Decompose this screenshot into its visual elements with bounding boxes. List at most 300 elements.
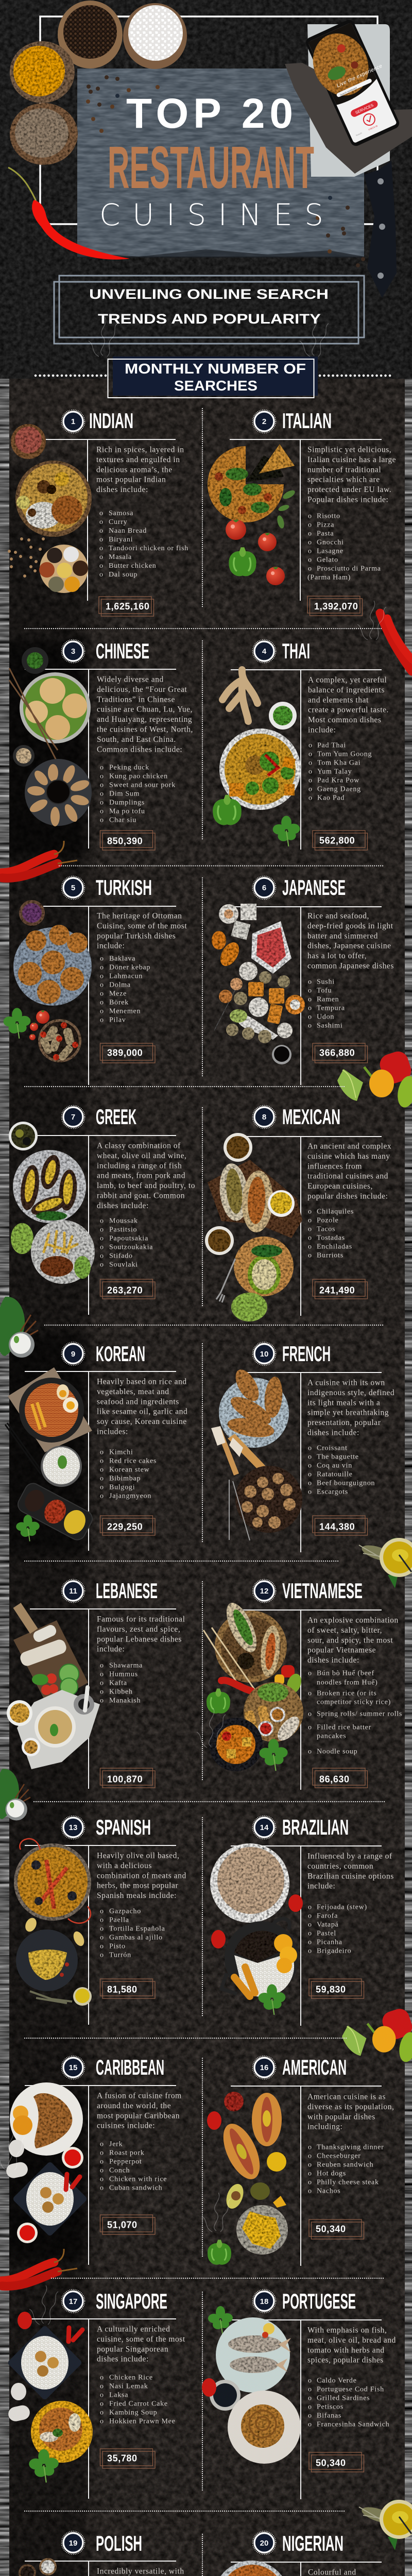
search count bbox=[100, 1979, 155, 1998]
dish list: o bbox=[100, 773, 104, 780]
description: create a powerful taste. bbox=[308, 706, 389, 715]
dish list: o bbox=[308, 530, 312, 538]
icon: fork bbox=[216, 1259, 235, 1302]
dish list: Nasi Lemak bbox=[109, 2382, 148, 2391]
number badge bbox=[252, 876, 276, 900]
dish list: o bbox=[100, 1670, 104, 1679]
dish list: o bbox=[308, 1921, 312, 1929]
search count: 229,250 bbox=[107, 1522, 143, 1532]
description: seafood and ingredients bbox=[97, 1397, 179, 1406]
description: Heavily based on rice and bbox=[97, 1378, 187, 1386]
dish list: Börek bbox=[109, 998, 129, 1007]
dish list: o bbox=[308, 1903, 312, 1911]
icon: knife handle bbox=[364, 161, 397, 298]
icon: phone with pizza app bbox=[301, 15, 408, 149]
description: Traditions” in Chinese bbox=[97, 695, 175, 704]
subtitle: UNVEILING ONLINE SEARCH bbox=[89, 286, 329, 302]
description: traditional cuisines and bbox=[307, 1172, 388, 1181]
icon: mustard bbox=[267, 2152, 286, 2172]
dish list: Fried Carrot Cake bbox=[109, 2400, 168, 2408]
icon: salt shakers bbox=[5, 2140, 29, 2179]
search count bbox=[309, 2219, 364, 2239]
icon: sesame bowl bbox=[13, 745, 35, 767]
dish list: Bifanas bbox=[317, 2412, 341, 2419]
icon: purple cabbage bowl bbox=[19, 900, 45, 926]
dish list: Lahmacun bbox=[109, 973, 143, 980]
dish list: o bbox=[100, 1680, 104, 1687]
icon: red peppers bbox=[211, 1894, 303, 1948]
icon: stuffed aubergine plate bbox=[13, 1150, 86, 1223]
number badge: 8 bbox=[262, 1113, 266, 1122]
dish list: Peking duck bbox=[109, 764, 149, 772]
icon: ketchup bbox=[224, 2092, 244, 2111]
dish list: Farofa bbox=[317, 1912, 338, 1920]
dish list: Tempura bbox=[317, 1005, 345, 1012]
section: Vietnamese bbox=[197, 1579, 402, 1790]
title bbox=[99, 90, 323, 232]
dish list: o bbox=[308, 539, 312, 546]
number badge bbox=[62, 2290, 84, 2313]
dish list: o bbox=[308, 1013, 312, 1021]
search count: 51,070 bbox=[107, 2219, 138, 2230]
dish list: Pepperpot bbox=[109, 2158, 142, 2166]
icon: coriander bbox=[259, 1739, 288, 1771]
number badge bbox=[62, 876, 84, 900]
icon: basil leaves bbox=[276, 488, 296, 529]
description: spices, popular dishes bbox=[307, 2356, 384, 2365]
icon: smoke bbox=[202, 2193, 231, 2232]
icon: oil dish bbox=[73, 1987, 92, 2006]
dish list: Moussak bbox=[109, 1217, 138, 1225]
description: deep-fried goods in light bbox=[307, 922, 393, 930]
number badge bbox=[252, 1580, 276, 1602]
search count: 59,830 bbox=[316, 1985, 346, 1995]
dish list: o bbox=[308, 1462, 312, 1469]
dish list: o bbox=[100, 1449, 104, 1456]
description: A classy combination of bbox=[97, 1142, 181, 1150]
dish list: o bbox=[308, 1243, 312, 1251]
icon: coriander bbox=[16, 1515, 40, 1541]
dish list: o bbox=[100, 2149, 104, 2157]
search count: 389,000 bbox=[107, 1048, 143, 1058]
dish list: Tom Yum Goong bbox=[317, 750, 372, 758]
description: cuisine are Chuan, Lu, Yue, bbox=[97, 705, 193, 714]
number badge bbox=[62, 1816, 84, 1839]
dish list: o bbox=[308, 742, 313, 749]
icon: napkin bbox=[17, 1690, 100, 1769]
icon: laksa bowl bbox=[31, 2401, 93, 2463]
icon: soup bowl bbox=[11, 424, 46, 459]
dish list: o bbox=[99, 527, 104, 535]
dish list: o bbox=[100, 1217, 104, 1225]
dotted divider bbox=[25, 1561, 340, 1562]
section: Caribbean bbox=[0, 2055, 182, 2286]
dish list: o bbox=[308, 1930, 312, 1937]
description: wheat, olive oil and wine, bbox=[97, 1151, 186, 1160]
dish list: Ma po tofu bbox=[109, 808, 145, 815]
icon: cleaver blade bbox=[307, 24, 390, 177]
description: European cuisines, bbox=[307, 1182, 373, 1191]
dish list: Vatapá bbox=[317, 1921, 339, 1929]
number badge bbox=[252, 1816, 276, 1839]
dish list: o bbox=[308, 1710, 312, 1718]
search count bbox=[313, 831, 368, 850]
description: textures and engulfed in bbox=[96, 455, 180, 464]
dish list: o bbox=[100, 1261, 104, 1268]
icon: nachos plate bbox=[236, 2205, 288, 2255]
number badge: 16 bbox=[260, 2063, 268, 2072]
dish list: o bbox=[100, 1917, 104, 1924]
dish list: Roast pork bbox=[109, 2149, 145, 2157]
dish list: o bbox=[100, 1662, 104, 1669]
icon: parsley bbox=[259, 1984, 285, 2015]
dish list: o bbox=[308, 1470, 312, 1479]
search count: 50,340 bbox=[316, 2224, 346, 2234]
heading: TURKISH bbox=[96, 875, 152, 900]
icon: peppercorn bowl bbox=[58, 1, 123, 69]
heading: LEBANESE bbox=[96, 1579, 158, 1603]
icon: baguettes bbox=[211, 1426, 268, 1476]
search count bbox=[307, 596, 363, 616]
dish list: Jerk bbox=[109, 2140, 123, 2148]
dish list: o bbox=[100, 2409, 104, 2416]
dish list: Döner kebap bbox=[109, 963, 150, 972]
icon: red chillies bbox=[1, 841, 77, 878]
dish list: Shawarma bbox=[109, 1662, 143, 1669]
dish list: Kung pao chicken bbox=[109, 773, 168, 780]
number badge: 1 bbox=[71, 417, 75, 426]
icon: small chillies bbox=[68, 2328, 82, 2342]
icon: dolma bowl bbox=[38, 1019, 81, 1062]
dish list: o bbox=[308, 512, 312, 520]
section: Portuguese bbox=[202, 2289, 396, 2499]
dish list: Manakish bbox=[109, 1697, 141, 1704]
icon: grilled chicken plate bbox=[10, 2082, 83, 2156]
heading: THAI bbox=[282, 639, 310, 663]
icon: curry bowl bbox=[219, 728, 301, 810]
description: around the world, the bbox=[97, 2102, 171, 2110]
icon: napkin bbox=[285, 63, 412, 174]
dish list: Reuben sandwich bbox=[317, 2161, 373, 2169]
dish list: Red rice cakes bbox=[109, 1457, 157, 1465]
dish list: Chicken Rice bbox=[109, 2374, 153, 2381]
dish list: Jajangmyeon bbox=[109, 1492, 151, 1500]
description: A cuisine with its own bbox=[307, 1379, 385, 1387]
dish list: Pizza bbox=[317, 521, 334, 529]
dish list: Turrón bbox=[109, 1952, 131, 1959]
icon: chopping board with wraps bbox=[13, 1605, 88, 1705]
search count: 850,390 bbox=[107, 836, 143, 846]
dish list: Nachos bbox=[317, 2188, 341, 2195]
icon: hot dogs bbox=[216, 2093, 282, 2184]
icon: spice bowls bbox=[2, 2558, 87, 2576]
search count bbox=[100, 2215, 155, 2234]
dish list: Tostadas bbox=[317, 1234, 345, 1242]
dish list: o bbox=[100, 973, 104, 980]
number badge bbox=[252, 640, 276, 663]
number badge: 14 bbox=[260, 1823, 269, 1832]
dish list: o bbox=[308, 2161, 312, 2169]
description: its light meals with a bbox=[307, 1398, 380, 1407]
icon: avocado and pickles bbox=[223, 2181, 286, 2211]
description: popular Vietnamese bbox=[307, 1646, 376, 1655]
icon: peppercorns scattered bbox=[86, 75, 365, 267]
description: with popular dishes bbox=[307, 2112, 375, 2121]
number badge bbox=[252, 1106, 276, 1128]
section: Brazilian bbox=[202, 1815, 412, 2063]
dish list: Pasta bbox=[317, 530, 334, 538]
search count: 81,580 bbox=[107, 1985, 138, 1995]
description: the cuisines of West, North, bbox=[97, 725, 193, 734]
description: An explosive combination bbox=[307, 1616, 399, 1625]
dish list: o bbox=[99, 536, 104, 544]
dish list: Chicken with rice bbox=[109, 2175, 167, 2183]
icon: soy sauce dish bbox=[272, 1045, 291, 1064]
dish list: Sushi bbox=[317, 978, 335, 986]
dish list: Kimchi bbox=[109, 1449, 133, 1456]
dish list: o bbox=[308, 556, 312, 564]
description: A culturally enriched bbox=[97, 2325, 170, 2334]
icon: spring onion bowl bbox=[269, 702, 297, 730]
dish list: Coq au vin bbox=[317, 1462, 352, 1469]
icon: tomatoes and pepper bbox=[226, 519, 285, 585]
description: specialties which are bbox=[307, 476, 380, 484]
icon: coriander bbox=[273, 816, 300, 846]
icon: cutlery bbox=[229, 1480, 250, 1540]
description: of sweet, salty, bitter, bbox=[307, 1626, 382, 1635]
number badge bbox=[252, 1342, 276, 1365]
section: Singapore bbox=[7, 2285, 185, 2499]
dish list: (Parma Ham) bbox=[307, 574, 351, 581]
dish list: o bbox=[308, 768, 313, 776]
smoke bbox=[89, 317, 329, 357]
icon: olive oil bowl bbox=[359, 2500, 412, 2550]
section: Korean bbox=[5, 1342, 187, 1551]
description: Most common dishes bbox=[308, 716, 382, 724]
dish list: o bbox=[99, 545, 104, 552]
search count: 35,780 bbox=[107, 2453, 138, 2464]
dish list: Dim Sum bbox=[109, 790, 140, 798]
icon: baklava plate bbox=[13, 925, 92, 1006]
section: Indian bbox=[8, 409, 188, 616]
dish list: Samosa bbox=[109, 510, 133, 517]
icon: lemon wedges bbox=[23, 1916, 86, 1948]
dish list: Yum Talay bbox=[317, 768, 352, 776]
description: Italian cuisine has a large bbox=[307, 455, 396, 464]
dish list: Tofu bbox=[317, 987, 332, 994]
description: cuisine, some of the most bbox=[97, 2335, 185, 2344]
description: presentation, popular bbox=[307, 1418, 381, 1427]
number badge bbox=[62, 2531, 84, 2554]
dish list: o bbox=[308, 2153, 312, 2160]
heading: NIGERIAN bbox=[282, 2531, 344, 2555]
icon: ginger bbox=[222, 670, 258, 721]
dish list: Beef bourguignon bbox=[317, 1480, 375, 1487]
dish list: o bbox=[308, 1912, 312, 1920]
icon: stuffed pepper board bbox=[234, 1236, 294, 1296]
icon: coriander and tomatoes bbox=[4, 1008, 49, 1040]
dish list: o bbox=[100, 1688, 104, 1696]
dish list: Udon bbox=[317, 1013, 334, 1021]
heading: SPANISH bbox=[96, 1815, 151, 1839]
description: and elements that bbox=[308, 696, 369, 704]
description: dishes include: bbox=[307, 1428, 359, 1437]
number badge: 5 bbox=[71, 884, 75, 892]
heading: GREEK bbox=[96, 1105, 136, 1129]
dish list: o bbox=[100, 2400, 104, 2408]
dish list: o bbox=[100, 955, 104, 962]
section: Nigerian bbox=[202, 2531, 386, 2576]
dish list: o bbox=[308, 2412, 312, 2419]
icon: pizza bbox=[208, 444, 295, 522]
description: Common dishes include: bbox=[97, 745, 182, 754]
dish list: o bbox=[100, 781, 104, 789]
icon: olive oil bowl bbox=[359, 1538, 412, 1588]
icon: phone with pizza app: SERVICES bbox=[354, 103, 374, 115]
dish list: Enchiladas bbox=[317, 1243, 352, 1251]
dish list: o bbox=[308, 777, 313, 784]
icon: coriander bbox=[29, 2449, 59, 2483]
dish list: Pozole bbox=[317, 1217, 339, 1224]
icon: rice bowl bbox=[41, 1446, 82, 1487]
heading: JAPANESE bbox=[282, 875, 346, 900]
dish list: o bbox=[100, 1907, 104, 1916]
heading: CHINESE bbox=[96, 639, 149, 663]
dotted divider bbox=[25, 628, 385, 629]
number badge bbox=[252, 410, 276, 433]
dish list: Broken rice (or its bbox=[317, 1690, 377, 1697]
description: cuisine which has many bbox=[307, 1152, 390, 1161]
search count bbox=[100, 1279, 155, 1299]
search count bbox=[313, 1043, 368, 1063]
icon: spice thali bbox=[39, 545, 88, 593]
title: CUISINES bbox=[99, 197, 323, 232]
description: with a delicious bbox=[97, 1861, 152, 1870]
dish list: o bbox=[100, 2158, 104, 2166]
dish list: o bbox=[308, 1005, 312, 1012]
dish list: Gaeng Daeng bbox=[317, 785, 361, 793]
dish list: o bbox=[100, 2382, 104, 2391]
number badge: 13 bbox=[69, 1823, 77, 1832]
dish list: Hummus bbox=[109, 1670, 138, 1679]
search count bbox=[313, 1768, 368, 1788]
dish list: Sweet and sour pork bbox=[109, 781, 176, 789]
dish list: o bbox=[100, 2417, 104, 2426]
dish list: Portuguese Cod Fish bbox=[317, 2385, 384, 2394]
dish list: o bbox=[308, 978, 312, 986]
number badge: 7 bbox=[71, 1113, 75, 1122]
dish list: o bbox=[100, 1934, 104, 1941]
dish list: Brigadeiro bbox=[317, 1947, 351, 1955]
description: combination of meats and bbox=[97, 1871, 186, 1880]
description: influences from bbox=[307, 1162, 362, 1171]
icon: banh mi basket bbox=[215, 1599, 287, 1683]
description: Brazilian cuisine options bbox=[307, 1872, 394, 1880]
description: simple yet breathtaking bbox=[307, 1409, 389, 1417]
dish list: Thanksgiving dinner bbox=[317, 2143, 384, 2151]
dish list: o bbox=[100, 1484, 104, 1491]
dish list: Tacos bbox=[317, 1225, 335, 1233]
icon: leaves and yoghurt bowl bbox=[0, 1769, 30, 1821]
dish list: o bbox=[308, 2188, 312, 2195]
dish list: Spring rolls/ summer rolls bbox=[317, 1710, 402, 1718]
heading: AMERICAN bbox=[282, 2055, 347, 2079]
description: Widely diverse and bbox=[97, 675, 164, 684]
dish list: o bbox=[308, 1938, 312, 1946]
dish list: o bbox=[100, 2167, 104, 2174]
description: and Huaiyang, representing bbox=[97, 715, 192, 724]
number badge bbox=[62, 1342, 84, 1365]
dish list: competitor sticky rice) bbox=[317, 1698, 391, 1706]
icon: leaves and yoghurt bowl bbox=[0, 1297, 38, 1358]
icon: chopsticks bbox=[5, 1423, 43, 1474]
icon: hummus and chickpea bowls bbox=[7, 1687, 94, 1756]
dish list: o bbox=[308, 2395, 312, 2402]
dish list: o bbox=[99, 562, 104, 570]
number badge bbox=[62, 2056, 84, 2079]
description: number of traditional bbox=[307, 465, 381, 474]
dish list: o bbox=[308, 1724, 312, 1731]
description: delicious aroma’s, the bbox=[96, 465, 173, 474]
icon: omelette plate bbox=[16, 1929, 78, 1991]
dish list: Sashimi bbox=[317, 1022, 342, 1029]
number badge: 17 bbox=[69, 2297, 77, 2306]
description: including a range of fish bbox=[97, 1161, 182, 1170]
dish list: Croissant bbox=[317, 1445, 348, 1452]
description: Cuisine, some of the most bbox=[97, 922, 187, 930]
dish list: o bbox=[100, 1942, 104, 1951]
description: most popular Caribbean bbox=[97, 2111, 180, 2120]
icon: sushi spread bbox=[212, 904, 305, 1043]
icon: phone with pizza app: CHECK IN bbox=[368, 125, 378, 131]
dish list: Baklava bbox=[109, 955, 135, 962]
search count bbox=[100, 1516, 155, 1535]
dish list: Paella bbox=[109, 1917, 129, 1924]
icon: pastry plate bbox=[228, 2391, 301, 2464]
dish list: Cheeseburger bbox=[317, 2153, 361, 2160]
title: TOP 20 bbox=[126, 90, 293, 137]
dish list: o bbox=[100, 1008, 104, 1015]
dish list: Bún bò Huế (beef bbox=[317, 1669, 374, 1677]
dish list: Bibimbap bbox=[109, 1475, 141, 1483]
icon: lettuce bbox=[231, 1293, 267, 1321]
heading: SINGAPORE bbox=[96, 2289, 167, 2313]
search count bbox=[309, 2452, 364, 2472]
icon: noodle bowl bbox=[19, 1378, 84, 1443]
heading: POLISH bbox=[96, 2531, 142, 2555]
description: and meats, from pork and bbox=[97, 1172, 185, 1180]
dish list: o bbox=[100, 1475, 104, 1483]
dish list: Pad Kra Pow bbox=[317, 777, 359, 784]
dish list: o bbox=[308, 1217, 312, 1224]
icon: red pepper bbox=[18, 2312, 32, 2329]
white outline frame bbox=[40, 16, 377, 224]
dotted divider bbox=[45, 1325, 385, 1326]
dish list: Dolma bbox=[109, 981, 131, 989]
dish list: o bbox=[100, 2175, 104, 2183]
icon: sauce dish bbox=[62, 2147, 83, 2168]
description: tomato with herbs and bbox=[307, 2346, 385, 2354]
subtitle frame bbox=[54, 276, 364, 344]
description: vegetables, meat and bbox=[97, 1387, 169, 1396]
number badge bbox=[252, 2531, 276, 2554]
dish list: o bbox=[100, 2392, 104, 2399]
search count bbox=[100, 831, 155, 850]
heading: KOREAN bbox=[96, 1342, 145, 1366]
description: include: bbox=[97, 1645, 125, 1654]
dish list: Gambas al ajillo bbox=[109, 1934, 163, 1941]
dish list: Gazpacho bbox=[109, 1907, 141, 1916]
